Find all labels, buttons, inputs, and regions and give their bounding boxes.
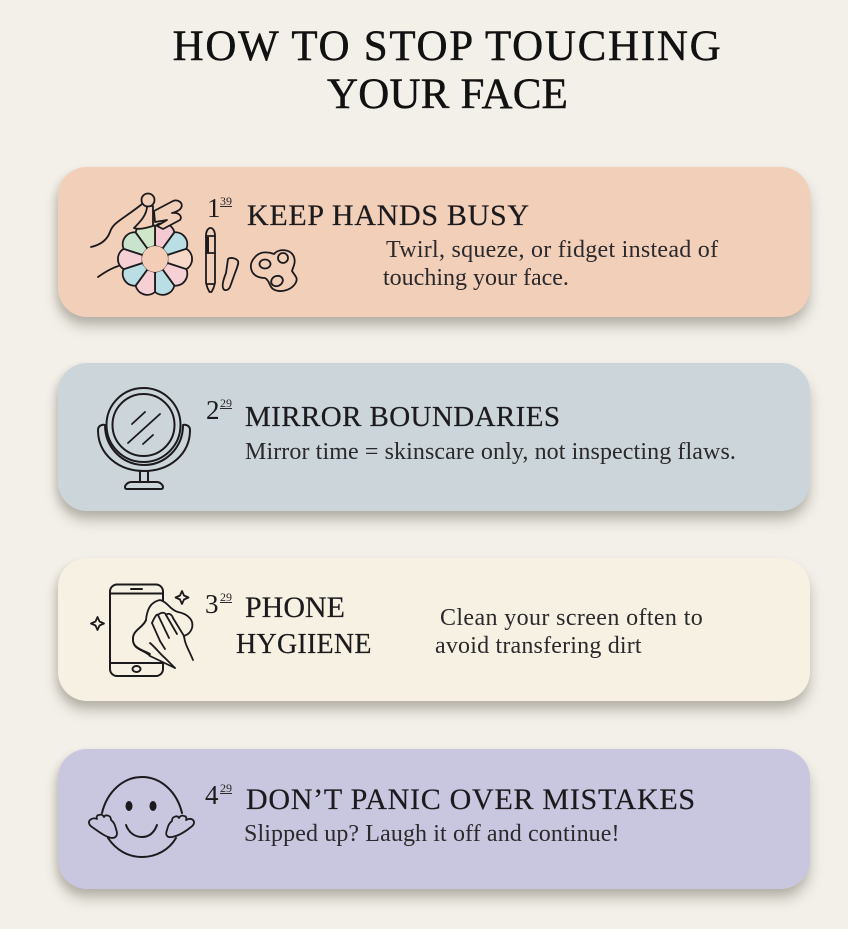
card 4 number: 4 bbox=[205, 780, 218, 810]
panel: don't panic bbox=[58, 749, 810, 889]
card 1 number bbox=[207, 193, 232, 223]
card 2 heading: MIRROR BOUNDARIES bbox=[245, 401, 560, 433]
panel: mirror boundaries bbox=[58, 363, 810, 511]
card 1 heading: KEEP HANDS BUSY bbox=[247, 199, 530, 232]
card 3 number bbox=[205, 589, 232, 619]
card 1 number: 1 bbox=[207, 193, 220, 223]
card 2 number: 2 bbox=[206, 395, 220, 425]
scrunchie bbox=[118, 223, 192, 295]
icon: pen bbox=[206, 228, 215, 292]
text: 29 bbox=[220, 590, 232, 604]
icon: phone being wiped bbox=[91, 584, 193, 676]
card 4 text: Slipped up? Laugh it off and continue! bbox=[244, 821, 620, 847]
icon: fidget spinner bbox=[251, 250, 297, 291]
card 1 text bbox=[383, 237, 718, 291]
card 3 number: 3 bbox=[205, 589, 218, 619]
text: 29 bbox=[220, 396, 232, 410]
panel: phone hygiene bbox=[58, 558, 810, 701]
card 2 text: Mirror time = skinscare only, not inspecting flaws. bbox=[245, 439, 736, 465]
card 2 number bbox=[206, 395, 232, 425]
card 3 heading: HYGIIENE bbox=[236, 629, 372, 660]
panel: keep hands busy bbox=[58, 167, 810, 317]
card 3 text: Clean your screen often to bbox=[440, 605, 703, 631]
title: YOUR FACE bbox=[327, 71, 568, 118]
card 1 text: touching your face. bbox=[383, 265, 569, 291]
icon: smiley with hands bbox=[89, 777, 194, 857]
card 3 text bbox=[435, 605, 703, 659]
text: 39 bbox=[220, 194, 232, 208]
card 3 heading: PHONE bbox=[245, 591, 345, 624]
card 4 number bbox=[205, 780, 232, 810]
title: HOW TO STOP TOUCHING bbox=[173, 23, 722, 70]
card 4 heading: DON’T PANIC OVER MISTAKES bbox=[246, 783, 696, 816]
title bbox=[173, 23, 722, 118]
card 1 text: Twirl, squeze, or fidget instead of bbox=[386, 237, 718, 263]
icon: pen cap bbox=[223, 258, 238, 290]
card 3 text: avoid transfering dirt bbox=[435, 633, 642, 659]
icon: mirror bbox=[98, 388, 190, 489]
card 3 heading bbox=[236, 591, 372, 660]
text: 29 bbox=[220, 781, 232, 795]
icon: hand with scrunchie bbox=[91, 194, 192, 295]
